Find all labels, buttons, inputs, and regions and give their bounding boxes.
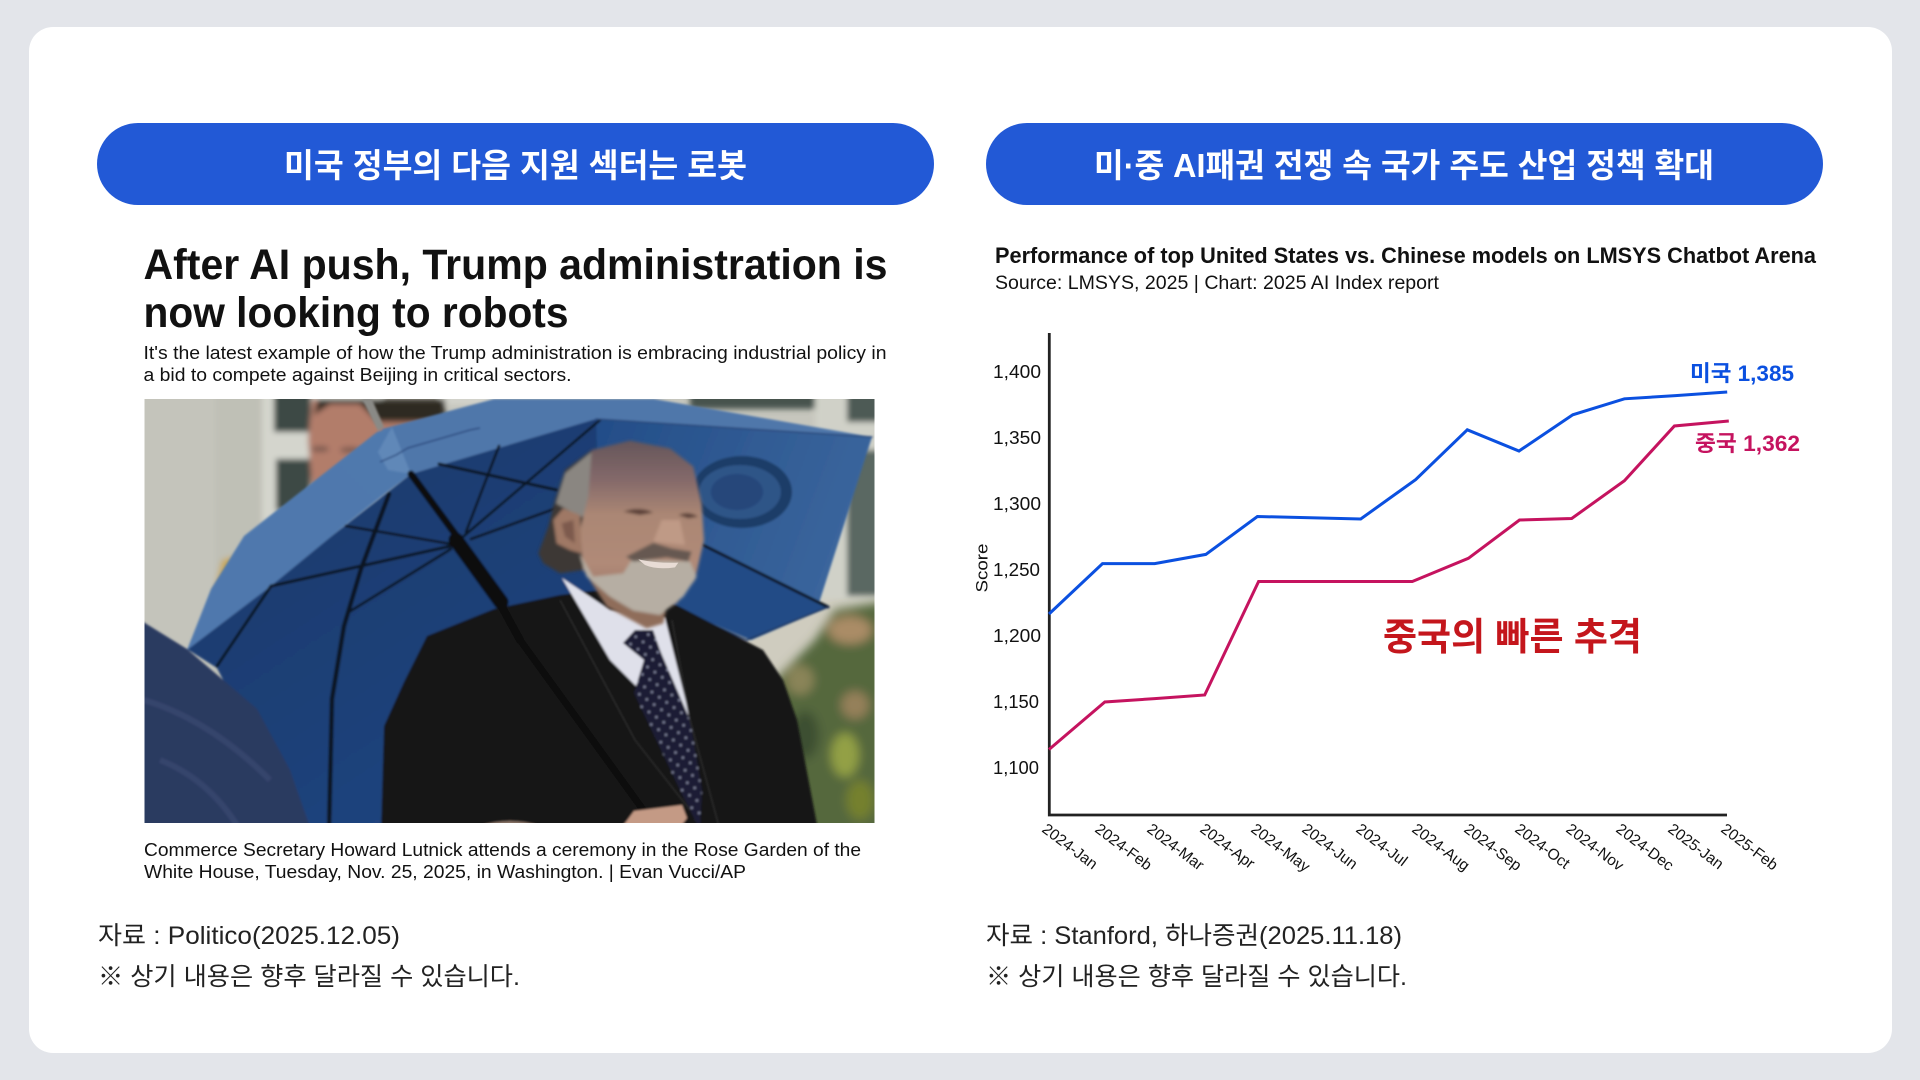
article subheading: a bid to compete against Beijing in critical sectors.: [144, 364, 572, 385]
x axis labels: 2024-Dec: [1613, 821, 1677, 875]
hair curls: [537, 450, 592, 575]
y axis labels: 1,350: [993, 428, 1041, 448]
suit: [381, 590, 818, 830]
right header pill: 미·중 AI패권 전쟁 속 국가 주도 산업 정책 확대: [1094, 147, 1714, 184]
y axis title: Score: [972, 544, 992, 592]
mustache: [626, 543, 692, 562]
y axis labels: 1,250: [993, 560, 1040, 580]
line: China: [1049, 421, 1729, 750]
line chart: [972, 333, 1800, 876]
right source note: [986, 922, 1407, 991]
chart title: [995, 243, 1817, 294]
photo caption: [144, 839, 861, 882]
y axis labels: 1,300: [993, 494, 1041, 514]
y axis labels: 1,200: [993, 626, 1041, 646]
left source note: [98, 922, 520, 991]
x axis labels: 2025-Jan: [1665, 821, 1726, 873]
man's head: [538, 441, 704, 628]
seal on umbrella: [692, 456, 792, 528]
umbrella ribs: [217, 419, 872, 830]
umbrella right canopy: [594, 419, 873, 602]
x axis labels: 2024-Jun: [1299, 821, 1360, 873]
bush: [776, 596, 874, 823]
right source note: 자료 : Stanford, 하나증권(2025.11.18): [986, 922, 1402, 950]
ear: [553, 508, 582, 553]
x axis labels: 2024-Nov: [1563, 821, 1627, 875]
article headline: After AI push, Trump administration is: [144, 241, 888, 289]
umbrella underside: [186, 418, 599, 823]
beard: [579, 553, 697, 615]
photo caption: Commerce Secretary Howard Lutnick attends a ceremony in the Rose Garden of the: [144, 839, 861, 860]
x axis labels: 2024-Sep: [1461, 821, 1525, 875]
eyes: [623, 509, 653, 515]
x axis labels: 2025-Feb: [1718, 821, 1781, 874]
umbrella left light panel: [187, 427, 411, 650]
y axis labels: 1,100: [993, 758, 1039, 778]
background man: [304, 399, 422, 485]
x axis labels: 2024-Aug: [1409, 821, 1473, 875]
nose: [653, 520, 685, 545]
x axis labels: 2024-Mar: [1144, 821, 1207, 874]
article photo: man with blue umbrella: [144, 399, 874, 823]
x axis labels: [1039, 821, 1781, 876]
x axis labels: 2024-Apr: [1197, 821, 1258, 873]
article subheading: It's the latest example of how the Trump administration is embracing industrial policy in: [144, 342, 886, 363]
article headline: [144, 241, 888, 337]
tie: [623, 630, 702, 830]
y axis labels: [993, 362, 1041, 778]
shirt: [560, 576, 690, 716]
right header pill: [986, 123, 1823, 205]
umbrella shaft: [411, 474, 644, 811]
y axis labels: 1,150: [993, 692, 1039, 712]
x axis labels: 2024-Jul: [1353, 821, 1410, 870]
photo caption: White House, Tuesday, Nov. 25, 2025, in Washington. | Evan Vucci/AP: [144, 861, 746, 882]
neck: [583, 570, 667, 628]
label: US value: 미국 1,385: [1690, 361, 1794, 386]
foreground shoulder: [140, 620, 311, 830]
left header pill: [97, 123, 934, 205]
y axis labels: 1,400: [993, 362, 1041, 382]
article subheading: [144, 342, 886, 385]
left source note: 자료 : Politico(2025.12.05): [98, 922, 400, 950]
left header pill: 미국 정부의 다음 지원 섹터는 로봇: [284, 147, 747, 184]
chart title: Source: LMSYS, 2025 | Chart: 2025 AI Index report: [995, 273, 1440, 294]
article headline: now looking to robots: [144, 289, 568, 337]
face: [580, 441, 704, 617]
hand: [622, 803, 689, 823]
x axis labels: 2024-Feb: [1092, 821, 1155, 874]
x axis labels: 2024-May: [1248, 821, 1313, 876]
right source note: ※ 상기 내용은 향후 달라질 수 있습니다.: [986, 963, 1407, 991]
mouth: [638, 559, 678, 568]
chart axes: [1049, 333, 1727, 815]
x axis labels: 2024-Jan: [1039, 821, 1100, 873]
lapel lines: [560, 600, 720, 830]
chart title: Performance of top United States vs. Chinese models on LMSYS Chatbot Arena: [995, 243, 1817, 268]
annotation: 중국의 빠른 추격: [1383, 617, 1642, 659]
x axis labels: 2024-Oct: [1512, 821, 1573, 873]
left source note: ※ 상기 내용은 향후 달라질 수 있습니다.: [98, 963, 520, 991]
line: United States: [1049, 392, 1727, 614]
umbrella top light panel: [382, 399, 872, 474]
label: China value: 중국 1,362: [1695, 431, 1800, 456]
